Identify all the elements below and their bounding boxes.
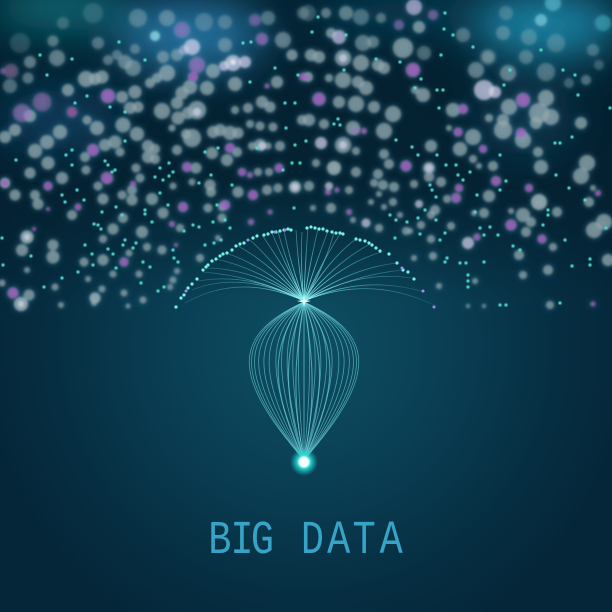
violet arc points bbox=[186, 230, 434, 307]
glowing source point bbox=[290, 448, 318, 476]
teardrop bundle of light lines bbox=[249, 302, 359, 460]
bright lavender highlights bbox=[18, 0, 611, 307]
upper fan of light lines bbox=[185, 228, 436, 306]
title: BIG DATA bbox=[208, 514, 403, 567]
purple bokeh particles bbox=[0, 10, 601, 306]
grey bokeh particles bbox=[0, 3, 612, 311]
arc of data points bbox=[176, 227, 414, 307]
top haze glows bbox=[0, 0, 612, 155]
glowing node at waist bbox=[297, 296, 311, 307]
small teal data dots bbox=[2, 13, 610, 305]
dark upper sky bbox=[0, 0, 612, 300]
